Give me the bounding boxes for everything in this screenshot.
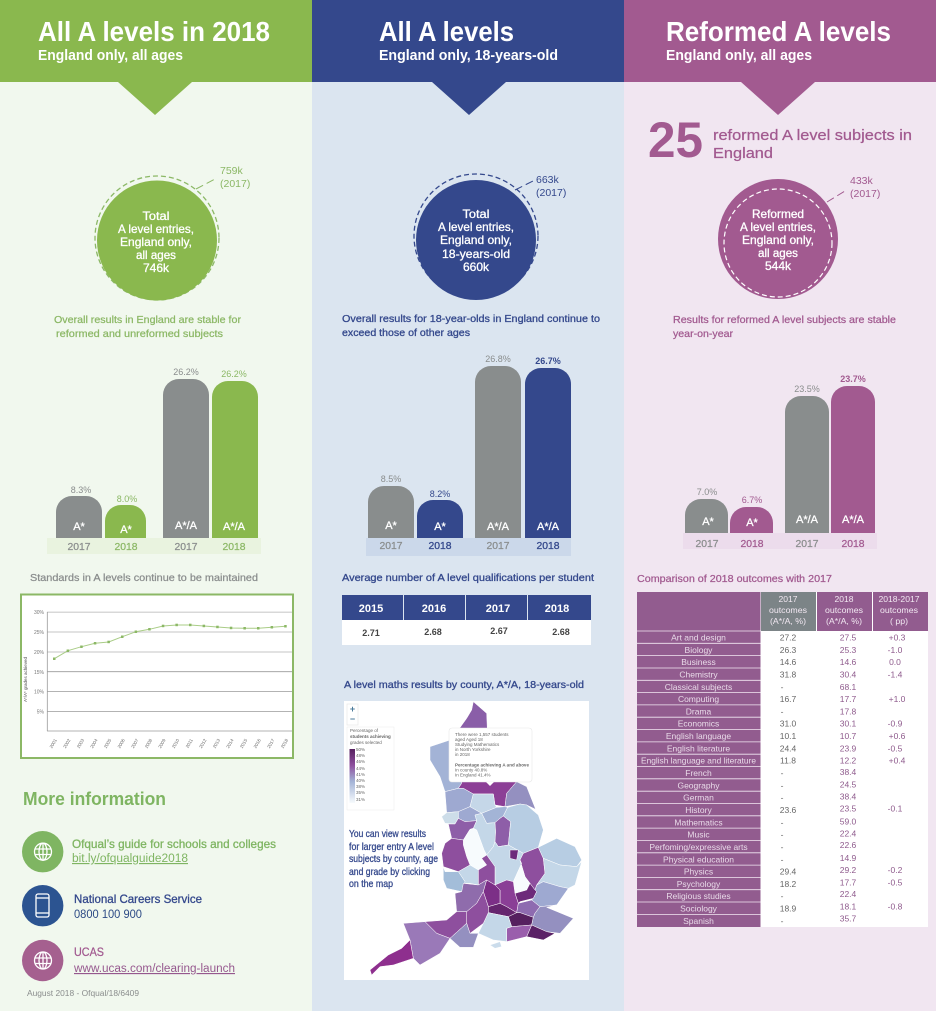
subject names: Geography [677, 780, 720, 790]
bar chart: overall results [47, 367, 261, 554]
2017 outcomes column: - [781, 768, 784, 778]
bar chart: reformed subjects: 2018 [842, 538, 865, 550]
heading: more information: More information [23, 789, 166, 809]
map zoom controls [347, 704, 358, 725]
bar chart: reformed subjects: 2017 [696, 538, 719, 550]
table: qualifications per student: 2015 [359, 603, 383, 615]
header: reformed A levels [624, 0, 936, 115]
bar chart: reformed subjects [683, 374, 877, 550]
table: comparison of outcomes: outcomes [880, 605, 918, 615]
2017 outcomes column: - [781, 817, 784, 827]
2017 outcomes column: 31.8 [780, 670, 797, 680]
subject names: Economics [678, 719, 719, 729]
map legend: 40% [356, 778, 365, 783]
bar chart: 18-year-olds [366, 354, 571, 556]
link: Ofqual guide: bit.ly/ofqualguide2018 [72, 853, 188, 865]
line chart: A*/A trend: 2017 [266, 738, 276, 749]
change column [888, 632, 906, 912]
header: all A levels in 2018 [0, 0, 312, 115]
change column: +0.6 [889, 731, 906, 741]
bar chart: reformed subjects: A*/A [842, 514, 865, 526]
map panel [344, 701, 589, 980]
subject names: Biology [685, 645, 713, 655]
table: comparison of outcomes: (A*/A, %) [770, 616, 806, 626]
map legend: 44% [356, 766, 365, 771]
table: comparison of outcomes: ( pp) [890, 616, 908, 626]
link: UCAS: UCAS [74, 945, 104, 959]
table: comparison of outcomes: 2017 [778, 594, 798, 604]
bar chart: reformed subjects: 23.5% [794, 384, 820, 394]
2018 outcomes column: 68.1 [840, 682, 857, 692]
link: Ofqual guide [22, 831, 276, 872]
line chart: A*/A trend: 2004 [89, 738, 99, 749]
map popup: In England 41.4% [455, 772, 491, 778]
subject names: Psychology [677, 879, 721, 889]
map popup: in 2018 [455, 752, 470, 757]
link: National Careers Service: 0800 100 900 [74, 909, 142, 921]
circle: total entries all ages: England only, [120, 235, 192, 249]
table: qualifications per student: 2.71 [362, 628, 380, 638]
map popup: aged Aged 18 [455, 737, 483, 742]
table: comparison of outcomes [637, 592, 928, 927]
map instruction text: on the map [349, 878, 393, 890]
bar chart: overall results: 26.2% [221, 369, 247, 379]
map popup: In county 40.8% [455, 768, 487, 772]
subject names: Religious studies [666, 891, 731, 901]
subject names: German [683, 793, 714, 803]
circle: total reformed entries [718, 179, 838, 299]
heading: reformed results [673, 314, 896, 340]
map instruction text: and grade by clicking [349, 866, 430, 878]
map popup: Percentage achieving A and above [455, 762, 529, 768]
2017 outcomes column: - [781, 793, 784, 803]
bar chart: overall results: A*/A [175, 520, 198, 532]
map legend: 35% [356, 790, 365, 795]
2018 outcomes column [840, 632, 857, 924]
circle: total entries all ages: A level entries, [118, 222, 194, 236]
heading: maths results by county: A level maths results by county, A*/A, 18-years-old [344, 679, 584, 691]
subject names: English literature [667, 743, 730, 753]
subject names: Computing [678, 694, 719, 704]
circle: total entries all ages: Total [142, 209, 170, 223]
2017 outcomes column: 27.2 [780, 632, 797, 642]
panel: reformed A levels [624, 0, 936, 927]
2017 outcomes column: 23.6 [780, 805, 797, 815]
change column: +0.3 [889, 632, 906, 642]
map popup: There were 1,557 students [455, 732, 509, 737]
bar chart: 18-year-olds: A*/A [537, 521, 560, 533]
2018 outcomes column: 27.5 [840, 632, 857, 642]
line chart: A*/A trend: 2013 [212, 738, 221, 749]
map legend: Percentage of [350, 728, 379, 733]
header: all A levels in 2018: All A levels in 2018 [38, 16, 270, 47]
2018 outcomes column: 24.5 [840, 780, 857, 790]
circle: total entries all ages: all ages [136, 248, 176, 262]
statistic: 25 reformed subjects [648, 112, 912, 168]
2018 outcomes column: 22.4 [840, 828, 857, 838]
bar chart: reformed subjects: 6.7% [742, 495, 762, 505]
map legend: grades selected [350, 740, 382, 745]
subject names: French [685, 768, 712, 778]
link: National Careers Service: National Careers Service [74, 892, 202, 906]
table: qualifications per student: 2.68 [424, 627, 442, 637]
bar chart: overall results: 26.2% [173, 367, 199, 377]
subject names: History [685, 805, 712, 815]
link: UCAS: www.ucas.com/clearing-launch [73, 963, 235, 975]
line chart: A*/A trend: 30% [34, 610, 45, 616]
subject names: Physics [684, 867, 713, 877]
table: qualifications per student: 2016 [422, 603, 446, 615]
change column: -0.1 [888, 804, 903, 814]
change column: -0.5 [888, 743, 903, 753]
change column: +0.4 [889, 756, 906, 766]
circle: total entries 18-year-olds: 660k [463, 260, 490, 274]
2018 outcomes column: 17.8 [840, 706, 857, 716]
bar chart: reformed subjects: A* [702, 516, 715, 528]
header: all A levels: England only, 18-years-old [379, 48, 558, 64]
change column: -0.9 [888, 719, 903, 729]
subject names: Spanish [683, 916, 714, 926]
callout: 663k 2017 [515, 174, 566, 199]
bar chart: 18-year-olds: 2018 [536, 540, 560, 552]
2018 outcomes column: 17.7 [840, 694, 857, 704]
bar chart: 18-year-olds: A*/A [487, 521, 510, 533]
line chart: A*/A trend: 2008 [144, 738, 153, 749]
map legend: 46% [356, 759, 365, 764]
2017 outcomes column: - [781, 780, 784, 790]
link: UCAS [22, 940, 235, 981]
table: qualifications per student: 2.68 [552, 627, 570, 637]
change column: -0.2 [888, 865, 903, 875]
bar chart: 18-year-olds: 8.2% [430, 489, 450, 499]
subject names: English language [666, 731, 731, 741]
bar chart: reformed subjects: 2017 [796, 538, 819, 550]
change column: -1.0 [888, 645, 903, 655]
callout: 433k 2017 [827, 175, 880, 202]
bar chart: reformed subjects: 2018 [740, 538, 764, 550]
bar chart: overall results: 2018 [222, 541, 246, 553]
2017 outcomes column: - [781, 706, 784, 716]
line chart: A*/A trend: 2003 [76, 738, 85, 749]
2017 outcomes column: 14.6 [780, 657, 797, 667]
bar chart: overall results: 2017 [68, 541, 91, 553]
map popup: Studying Mathematics [455, 742, 500, 747]
bar chart: 18-year-olds: 2017 [380, 540, 403, 552]
heading: overall results: reformed and unreformed subjects [56, 328, 223, 340]
subject names: Art and design [671, 632, 726, 642]
2017 outcomes column: - [781, 842, 784, 852]
callout: 759k 2017 [196, 165, 250, 190]
circle: total entries 18-year-olds: 18-years-old [442, 247, 510, 261]
circle: total reformed entries: all ages [758, 246, 798, 260]
line chart: A*/A trend: 2001 [49, 738, 58, 749]
subject names: Mathematics [674, 817, 723, 827]
bar chart: 18-year-olds: 8.5% [381, 474, 401, 484]
line chart: A*/A trend: 20% [34, 650, 45, 656]
panel: all A levels 18-year-olds [312, 0, 624, 980]
bar chart: 18-year-olds: 2017 [486, 540, 510, 552]
circle: total entries 18-year-olds [414, 174, 538, 300]
table: comparison of outcomes: 2018-2017 [878, 594, 920, 604]
2017 outcomes column: 31.0 [780, 719, 797, 729]
map legend: 38% [356, 784, 365, 789]
2018 outcomes column: 22.6 [840, 840, 857, 850]
line chart: A*/A trend: 2018 [280, 738, 289, 749]
callout: 663k 2017: (2017) [536, 187, 566, 199]
2017 outcomes column: 11.8 [780, 756, 796, 766]
table: qualifications per student [342, 595, 591, 645]
line chart: A*/A trend: 2007 [130, 738, 140, 749]
circle: total entries all ages [95, 176, 219, 300]
heading: standards: Standards in A levels continue to be maintained [30, 572, 258, 584]
bar chart: reformed subjects: A* [746, 517, 759, 529]
callout: 663k 2017: 663k [536, 174, 560, 186]
map instruction text: subjects by county, age [349, 853, 438, 865]
footer reference: August 2018 - Ofqual/18/6409 [27, 989, 140, 998]
map legend: 48% [356, 753, 365, 758]
header: all A levels: All A levels [379, 16, 514, 47]
circle: total entries 18-year-olds: Total [462, 207, 490, 221]
subject names: Physical education [663, 854, 734, 864]
table: qualifications per student: 2018 [545, 603, 569, 615]
heading: overall results 18-year-olds [342, 313, 600, 339]
table: comparison of outcomes: 2018 [834, 594, 854, 604]
circle: total entries all ages: 746k [143, 261, 170, 275]
callout: 759k 2017: 759k [220, 165, 244, 177]
2017 outcomes column: - [781, 854, 784, 864]
2017 outcomes column: - [781, 682, 784, 692]
2018 outcomes column: 12.2 [840, 756, 857, 766]
heading: overall results 18-year-olds: exceed those of other ages [342, 327, 470, 339]
table: qualifications per student: 2017 [486, 603, 510, 615]
change column: 0.0 [889, 657, 901, 667]
heading: overall results 18-year-olds: Overall results for 18-year-olds in England continue to [342, 313, 600, 325]
map zoom controls: + [350, 704, 355, 714]
heading: reformed results: Results for reformed A level subjects are stable [673, 314, 896, 326]
heading: average number of qualifications: Average number of A level qualifications per student [342, 572, 594, 584]
line chart: A*/A trend: 5% [37, 710, 45, 716]
subject names: English language and literature [641, 756, 756, 766]
2017 outcomes column: - [781, 891, 784, 901]
2017 outcomes column: - [781, 916, 784, 926]
bar chart: overall results: 2017 [174, 541, 198, 553]
2018 outcomes column: 14.9 [840, 853, 857, 863]
circle: total entries 18-year-olds: A level entries, [438, 220, 514, 234]
change column: -0.8 [888, 902, 903, 912]
2017 outcomes column [780, 632, 797, 926]
2018 outcomes column: 23.5 [840, 804, 857, 814]
subject names: Drama [686, 706, 712, 716]
bar chart: 18-year-olds: A* [434, 521, 447, 533]
heading: overall results: Overall results in England are stable for [54, 314, 242, 326]
change column: +1.0 [889, 694, 906, 704]
subject names: Chemistry [679, 670, 718, 680]
bar chart: overall results: 8.3% [71, 485, 91, 495]
circle: total reformed entries: England only, [742, 233, 814, 247]
line chart: A*/A trend: A*/A* grades achieved [23, 656, 28, 702]
line chart: A*/A trend: 15% [34, 670, 45, 676]
line chart: A*/A trend: 2002 [62, 738, 72, 749]
bar chart: 18-year-olds: 26.7% [535, 356, 561, 366]
map legend: 31% [356, 797, 365, 802]
map instruction text: You can view results [349, 828, 426, 840]
bar chart: overall results: 2018 [114, 541, 138, 553]
table: comparison of outcomes: outcomes [825, 605, 863, 615]
change column: -1.4 [888, 670, 903, 680]
map instruction text: for larger entry A level [349, 841, 434, 853]
header: reformed A levels: England only, all ages [666, 48, 812, 64]
2018 outcomes column: 25.3 [840, 645, 857, 655]
callout: 433k 2017: (2017) [850, 188, 880, 200]
line chart: A*/A trend: 2010 [171, 738, 181, 749]
bar chart: 18-year-olds: 2018 [428, 540, 452, 552]
2017 outcomes column: 16.7 [780, 694, 797, 704]
map legend: 50% [356, 747, 365, 752]
change column: -0.5 [888, 878, 903, 888]
line chart: A*/A trend: 2012 [198, 738, 208, 749]
line chart: A*/A trend: 2009 [157, 738, 167, 749]
circle: total reformed entries: Reformed [752, 207, 804, 221]
2017 outcomes column: 26.3 [780, 645, 797, 655]
circle: total entries 18-year-olds: England only, [440, 233, 512, 247]
callout: 759k 2017: (2017) [220, 178, 250, 190]
table: qualifications per student: 2.67 [490, 626, 508, 636]
2017 outcomes column: 29.4 [780, 867, 797, 877]
2018 outcomes column: 29.2 [840, 865, 857, 875]
subject names: Classical subjects [665, 682, 732, 692]
line chart: A*/A trend: 2006 [117, 738, 126, 749]
2018 outcomes column: 23.9 [840, 743, 857, 753]
2018 outcomes column: 38.4 [840, 792, 857, 802]
2018 outcomes column: 17.7 [840, 878, 857, 888]
map: England counties [370, 702, 582, 975]
map legend: 41% [356, 772, 365, 777]
callout: 433k 2017: 433k [850, 175, 874, 187]
line chart: A*/A trend [21, 594, 293, 758]
map instruction text [349, 828, 438, 890]
statistic: 25 reformed subjects: England [713, 145, 773, 162]
2017 outcomes column: 18.9 [780, 904, 797, 914]
line chart: A*/A trend: 2015 [239, 738, 249, 749]
bar chart: overall results: A* [73, 521, 86, 533]
link: National Careers Service [22, 885, 202, 926]
table: comparison of outcomes: outcomes [769, 605, 807, 615]
bar chart: overall results: A*/A [223, 521, 246, 533]
line chart: A*/A trend: 2005 [103, 738, 113, 749]
2018 outcomes column: 30.4 [840, 670, 857, 680]
subject names: Perfoming/expressive arts [649, 842, 748, 852]
2017 outcomes column: 24.4 [780, 743, 797, 753]
bar chart: reformed subjects: 7.0% [697, 487, 717, 497]
line chart: A*/A trend: 25% [34, 630, 45, 636]
2018 outcomes column: 38.4 [840, 767, 857, 777]
map popup [449, 728, 532, 786]
line chart: A*/A trend: 2014 [225, 738, 235, 749]
map popup: in North Yorkshire [455, 747, 491, 752]
panel: all A levels in 2018 [0, 0, 312, 998]
line chart: A*/A trend: 2011 [185, 738, 194, 749]
map legend [347, 727, 394, 810]
statistic: 25 reformed subjects: reformed A level subjects in [713, 127, 912, 144]
2018 outcomes column: 59.0 [840, 816, 857, 826]
header: reformed A levels: Reformed A levels [666, 16, 891, 47]
table: comparison of outcomes: (A*/A, %) [826, 616, 862, 626]
subject names: Business [681, 657, 716, 667]
bar chart: overall results: A* [120, 524, 133, 536]
line chart: A*/A trend: 10% [34, 690, 45, 696]
2017 outcomes column: - [781, 830, 784, 840]
2018 outcomes column: 30.1 [840, 719, 857, 729]
subject names: Sociology [680, 904, 718, 914]
heading: overall results [54, 314, 242, 340]
map zoom controls: − [350, 714, 355, 724]
2018 outcomes column: 18.1 [840, 902, 857, 912]
2018 outcomes column: 14.6 [840, 657, 857, 667]
bar chart: 18-year-olds: A* [385, 520, 398, 532]
statistic: 25 reformed subjects: 25 [648, 112, 703, 168]
2018 outcomes column: 22.4 [840, 889, 857, 899]
bar chart: reformed subjects: 23.7% [840, 374, 866, 384]
circle: total reformed entries: 544k [765, 259, 792, 273]
subject names [641, 632, 756, 926]
2017 outcomes column: 10.1 [780, 731, 797, 741]
link: Ofqual guide: Ofqual’s guide for schools and colleges [72, 837, 276, 851]
bar chart: 18-year-olds: 26.8% [485, 354, 511, 364]
header: all A levels [312, 0, 624, 115]
line chart: A*/A trend: 2016 [253, 738, 262, 749]
heading: comparison of outcomes: Comparison of 2018 outcomes with 2017 [637, 573, 832, 585]
bar chart: overall results: 8.0% [117, 494, 137, 504]
circle: total reformed entries: A level entries, [740, 220, 816, 234]
map legend: students achieving [350, 734, 391, 739]
heading: reformed results: year-on-year [673, 328, 734, 340]
2017 outcomes column: 18.2 [780, 879, 797, 889]
header: all A levels in 2018: England only, all ages [38, 48, 183, 64]
bar chart: reformed subjects: A*/A [796, 514, 819, 526]
subject names: Music [687, 830, 710, 840]
2018 outcomes column: 35.7 [840, 914, 857, 924]
2018 outcomes column: 10.7 [840, 731, 857, 741]
